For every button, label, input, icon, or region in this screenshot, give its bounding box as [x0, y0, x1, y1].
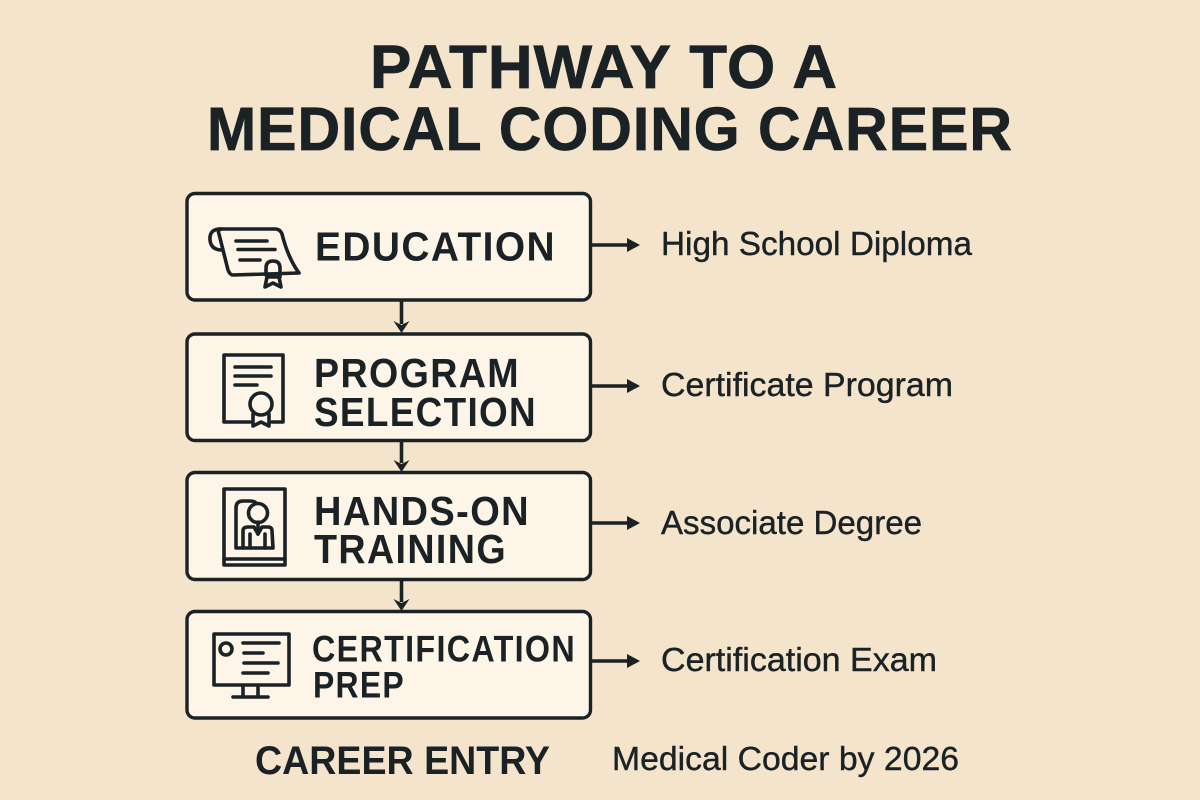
heading: program selection: PROGRAM	[314, 350, 520, 396]
arrow: to certificate program	[591, 379, 640, 393]
arrow: hands-on training to certification prep	[394, 580, 410, 611]
heading: certification prep: CERTIFICATION	[312, 628, 576, 670]
icon: person in book	[224, 489, 285, 565]
label: high school diploma: High School Diploma	[661, 225, 973, 262]
title: MEDICAL CODING CAREER	[207, 95, 1013, 163]
label: certificate program: Certificate Program	[661, 366, 953, 403]
arrow: program selection to hands-on training	[394, 441, 410, 472]
title	[207, 33, 1013, 163]
heading: hands-on training	[314, 488, 530, 572]
label: associate degree: Associate Degree	[661, 504, 922, 541]
label: certification exam: Certification Exam	[661, 641, 937, 678]
heading: career entry: CAREER ENTRY	[255, 739, 550, 783]
label: medical coder by 2026: Medical Coder by 2026	[612, 740, 959, 777]
icon: certificate	[224, 355, 283, 426]
panel: education	[187, 194, 590, 300]
heading: certification prep	[312, 628, 576, 706]
icon: diploma scroll	[210, 229, 299, 287]
heading: program selection	[314, 350, 537, 435]
title: PATHWAY TO A	[370, 33, 838, 101]
heading: program selection: SELECTION	[314, 389, 537, 435]
icon: computer monitor	[214, 634, 289, 697]
heading: hands-on training: TRAINING	[314, 526, 507, 572]
heading: certification prep: PREP	[313, 664, 405, 706]
panel: program selection	[187, 334, 590, 440]
panel: hands-on training	[187, 472, 590, 580]
arrow: to certification exam	[591, 654, 640, 668]
arrow: to associate degree	[591, 516, 640, 530]
heading: hands-on training: HANDS-ON	[314, 488, 530, 534]
heading: education: EDUCATION	[315, 224, 556, 270]
panel: certification prep	[187, 612, 590, 718]
arrow: to high school diploma	[591, 238, 640, 252]
arrow: education to program selection	[394, 300, 410, 333]
